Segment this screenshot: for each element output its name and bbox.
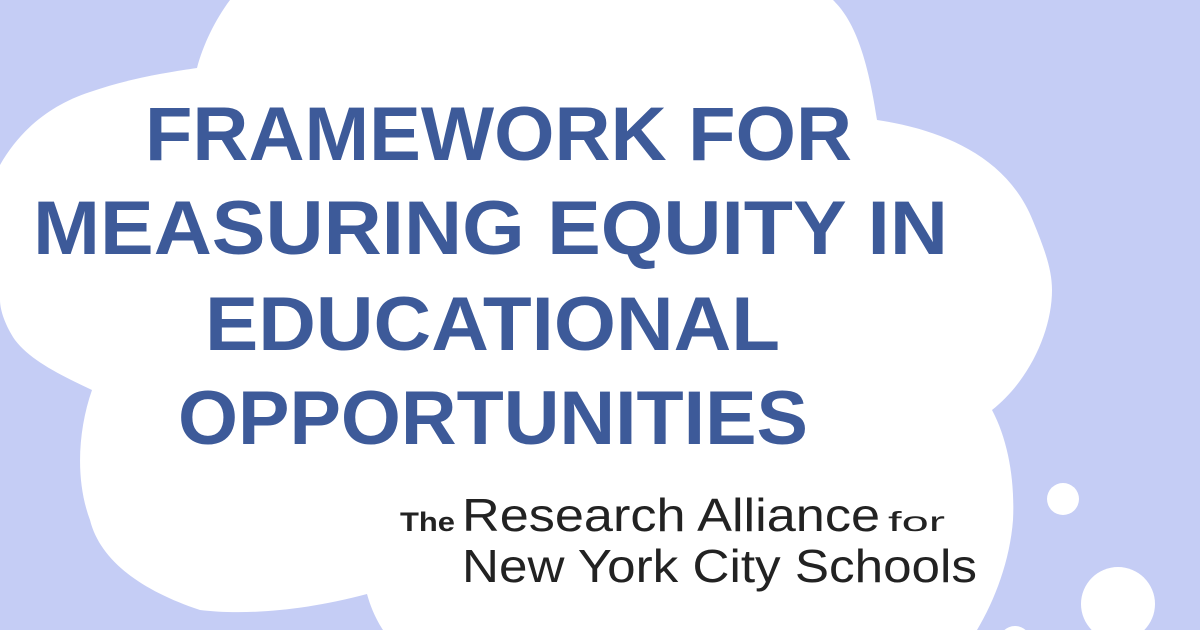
title: EDUCATIONAL [205,282,780,367]
title: OPPORTUNITIES [178,376,808,461]
logo: The Research Alliance for New York City Schools: for [888,506,945,537]
small bubbles [999,483,1155,630]
title: MEASURING EQUITY IN [33,186,948,271]
logo: The Research Alliance for New York City Schools [400,489,977,592]
logo: The Research Alliance for New York City Schools: New York City Schools [462,540,977,592]
logo: The Research Alliance for New York City Schools: Research Alliance [462,489,880,541]
title [33,92,948,461]
logo: The Research Alliance for New York City Schools: The [400,507,455,537]
title: FRAMEWORK FOR [145,92,852,177]
